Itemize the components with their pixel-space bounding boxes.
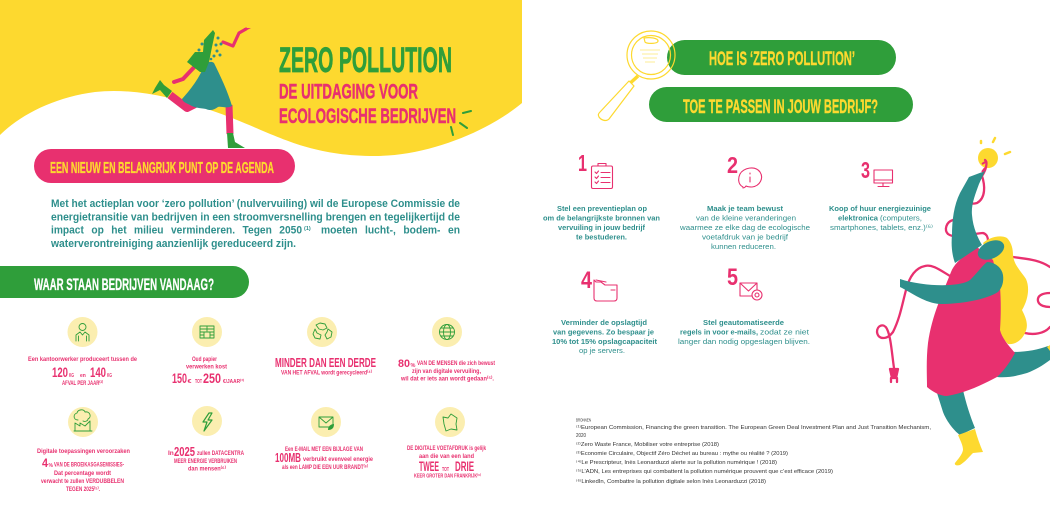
stat: data centres: MEER ENERGIE VERBRUIKEN	[174, 458, 237, 465]
illustration: dancing woman with light bulb and cord	[877, 138, 1050, 465]
intro paragraph: impact op het milieu verminderen. Tegen 2050	[51, 224, 302, 236]
stat: paper cost: TOT	[195, 379, 202, 385]
stat: data centres: zullen DATACENTRA	[197, 450, 244, 457]
stat: waste per employee: en	[80, 373, 86, 379]
step 2 number and info bubble icon: 2	[727, 152, 738, 178]
sources list	[576, 418, 931, 485]
stat: paper cost: 250	[203, 370, 221, 386]
stat: paper cost: 150	[172, 370, 187, 386]
step 4 text: Verminder de opslagtijd	[561, 318, 647, 327]
step 5 number and email icon: 5	[727, 264, 738, 291]
sources list: ⁽³⁾Economie Circulaire, Objectif Zéro Déchet au bureau : mythe ou réalité ? (2019)	[576, 451, 788, 457]
stat: waste per employee: Een kantoorwerker produceert tussen de	[28, 356, 137, 363]
stat: waste per employee: 120	[52, 364, 68, 380]
step 3 text: elektronica	[838, 214, 879, 222]
step 3 text	[829, 204, 933, 232]
stat: digital footprint: DE DIGITALE VOETAFDRUK is gelijk	[407, 445, 486, 452]
stat: waste per employee	[28, 356, 137, 387]
step 5 text: langer dan nodig opgeslagen blijven.	[678, 337, 810, 346]
heading pill: how to apply line one: HOE IS ‘ZERO POLLUTION’	[709, 49, 855, 70]
stat: digital pollution awareness: wil dat er iets aan wordt gedaan⁽⁵⁾.	[400, 374, 494, 382]
icon: office worker	[68, 317, 98, 347]
stat: digital footprint	[407, 445, 486, 480]
step 4 text: 10% tot 15% opslagcapaciteit	[552, 337, 657, 346]
stat: digital pollution awareness: VAN DE MENSEN die zich bewust	[417, 360, 496, 367]
heading pill: how to apply line two: TOE TE PASSEN IN JOUW BEDRIJF?	[683, 97, 878, 118]
stat: digital footprint: KEER GROTER DAN FRANKRIJK⁽⁶⁾	[414, 472, 481, 480]
step 1 text	[543, 204, 660, 242]
stat: data centres: In	[168, 450, 174, 457]
stat: digital footprint: aan die van een land	[419, 453, 474, 460]
stat: digital pollution awareness	[398, 358, 496, 382]
step 2 text	[679, 204, 810, 251]
stat: digital footprint: TWEE	[419, 459, 439, 474]
stat: digital pollution awareness: %	[410, 363, 416, 369]
heading pill: where companies stand	[0, 266, 249, 298]
stat: digital pollution awareness: 80	[398, 358, 410, 370]
step 3 text: smartphones, tablets, enz.)⁽⁶⁾	[830, 223, 933, 232]
stat: greenhouse gases: %	[48, 463, 54, 469]
step 2 number and info bubble icon	[727, 152, 762, 188]
step 5 number and email icon	[727, 264, 762, 300]
intro paragraph: Met het actieplan voor ‘zero pollution’ (nulvervuiling) wil de Europese Commissie de	[51, 198, 460, 210]
stat: paper cost: €/JAAR⁽³⁾	[223, 378, 245, 385]
icon: magnifying glass	[598, 38, 660, 120]
yellow wave header background	[0, 0, 522, 156]
stat: waste per employee: KG	[69, 373, 74, 379]
stat: recycled waste: MINDER DAN EEN DERDE	[275, 355, 376, 370]
light bulb	[978, 138, 1010, 168]
stat: data centres: 2025	[174, 445, 195, 459]
stat: recycled waste: VAN HET AFVAL wordt gerecycleerd⁽⁴⁾	[281, 368, 372, 376]
intro paragraph	[50, 198, 460, 250]
stat: greenhouse gases: Dat percentage wordt	[54, 470, 112, 477]
heading pill: where companies stand: WAAR STAAN BEDRIJVEN VANDAAG?	[34, 275, 214, 294]
icon: email with leaf	[311, 407, 341, 437]
intro paragraph: moeten lucht-, bodem- en	[321, 224, 460, 236]
step 4 text: van gegevens. Zo bespaar je	[553, 328, 654, 336]
stat: greenhouse gases: 4	[42, 456, 48, 470]
sources list: ⁽²⁾Zero Waste France, Mobiliser votre entreprise (2018)	[576, 442, 719, 448]
step 4 number and folder icon: 4	[581, 267, 593, 294]
step 3 number and monitor icon	[861, 157, 892, 186]
icon: recycling	[307, 317, 337, 347]
step 1 text: te bestuderen.	[576, 232, 627, 242]
stat: greenhouse gases: TEGEN 2025⁽⁵⁾.	[66, 485, 100, 493]
stat: paper cost: Oud papier	[192, 356, 217, 363]
stat: recycled waste	[275, 355, 376, 376]
sources list: ⁽⁴⁾Le Prescripteur, Inès Leonarduzzi alerte sur la pollution numérique ! (2018)	[576, 460, 777, 466]
step 1 text: vervuiling in jouw bedrijf	[558, 223, 645, 232]
sources list: ⁽⁵⁾L’ADN, Les entreprises qui combattent la pollution numérique prouvent que c’est efficace (2019)	[576, 469, 833, 475]
title: DE UITDAGING VOOR	[279, 80, 418, 104]
step 4 text	[552, 318, 657, 355]
stat: waste per employee: KG	[107, 373, 112, 379]
step 1 number and clipboard icon	[578, 150, 612, 188]
step 5 text: regels in voor e-mails,	[680, 328, 758, 336]
heading pill: how to apply line two	[649, 87, 913, 122]
stat: waste per employee: 140	[90, 364, 106, 380]
title	[279, 41, 456, 128]
step 2 text: waarmee ze elke dag de ecologische	[679, 223, 810, 232]
step 3 text: (computers,	[880, 214, 922, 222]
power cord	[877, 160, 1050, 382]
title: ZERO POLLUTION	[279, 41, 452, 80]
title: ECOLOGISCHE BEDRIJVEN	[279, 104, 456, 128]
step 5 text	[678, 318, 810, 346]
stat: paper cost: verwerken kost	[186, 364, 228, 370]
stat: digital pollution awareness: zijn van digitale vervuiling,	[412, 368, 481, 375]
magnifier lens	[627, 31, 675, 79]
icon: greenhouse smoke	[68, 407, 98, 437]
step 5 text: zodat ze niet	[760, 328, 810, 336]
icon: lightning bolt	[192, 406, 222, 436]
stat: email attachment: verbruikt evenveel energie	[303, 456, 373, 463]
step 3 text: Koop of huur energiezuinige	[829, 204, 931, 213]
heading pill: new agenda point: EEN NIEUW EN BELANGRIJK PUNT OP DE AGENDA	[50, 160, 274, 177]
stat: waste per employee: AFVAL PER JAAR⁽²⁾	[62, 379, 103, 387]
step 3 number and monitor icon: 3	[861, 157, 870, 183]
sources list: 2020	[576, 433, 586, 439]
intro paragraph: waterverontreiniging aanzienlijk gereduceerd zijn.	[50, 238, 296, 250]
icon: map of France	[435, 407, 465, 437]
step 1 text: Stel een preventieplan op	[557, 204, 647, 213]
step 4 text: op je servers.	[579, 346, 625, 355]
step 2 text: Maak je team bewust	[707, 204, 783, 213]
stat: digital footprint: TOT	[442, 467, 449, 473]
intro paragraph: (1)	[304, 226, 311, 232]
stat: email attachment: Een E-MAIL MET EEN BIJLAGE VAN	[285, 446, 363, 453]
step 2 text: voetafdruk van je bedrijf	[702, 232, 789, 242]
icon: stacks of paper	[192, 317, 222, 347]
stat: email attachment: als een LAMP DIE EEN UUR BRANDT⁽⁶⁾	[282, 463, 368, 471]
stat: email attachment	[275, 446, 373, 471]
intro paragraph: energietransitie van bedrijven in een stroomversnelling brengen en tegelijkertijd de	[51, 212, 460, 224]
stat: greenhouse gases: verwacht te zullen VERDUBBELEN	[41, 478, 124, 485]
icon: globe	[432, 317, 462, 347]
stat: greenhouse gases: VAN DE BROEIKASGASEMISSIES-	[54, 462, 124, 468]
heading pill: how to apply line one	[667, 40, 896, 75]
step 2 text: van de kleine veranderingen	[696, 214, 796, 222]
stat: data centres	[168, 445, 244, 472]
stat: greenhouse gases	[37, 448, 130, 493]
heading pill: new agenda point	[34, 149, 295, 183]
stat: greenhouse gases: Digitale toepassingen veroorzaken	[37, 448, 130, 455]
stat: paper cost: €	[188, 379, 192, 385]
stat: email attachment: 100MB	[275, 451, 301, 465]
sources list: ⁽⁶⁾LinkedIn, Combattre la pollution digitale selon Inès Leonarduzzi (2018)	[576, 479, 766, 485]
stat: data centres: dan mensen⁽⁶⁾	[188, 464, 226, 472]
step 5 text: Stel geautomatiseerde	[703, 318, 784, 327]
stat: digital footprint: DRIE	[455, 459, 474, 474]
sources list: ⁽¹⁾European Commission, Financing the green transition. The European Green Deal Investment Plan and Just Transition Mechanism,	[576, 425, 931, 431]
step 4 number and folder icon	[581, 267, 617, 301]
stat: paper cost	[172, 356, 245, 386]
illustration: running woman	[152, 28, 251, 148]
icon: title sparks	[451, 111, 471, 135]
step 1 text: om de belangrijkste bronnen van	[543, 214, 660, 222]
sources list: BRONNEN	[576, 418, 591, 422]
step 1 number and clipboard icon: 1	[578, 150, 587, 176]
step 2 text: kunnen reduceren.	[711, 242, 776, 251]
